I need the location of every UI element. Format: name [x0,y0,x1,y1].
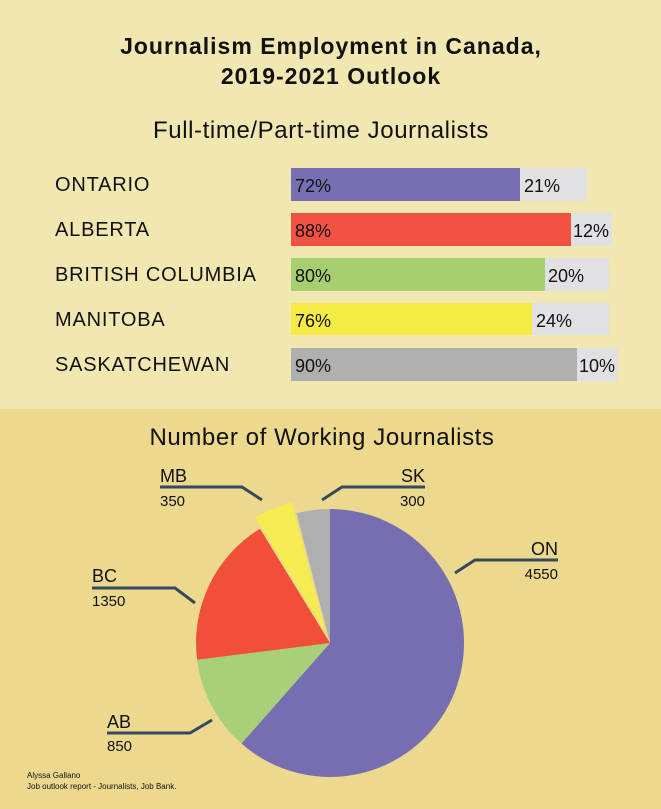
heading: number of journalists: Number of Working Journalists [149,424,495,451]
text: BC [92,566,117,586]
row: Manitoba: 24% [536,311,572,331]
row: Saskatchewan: 10% [579,356,615,376]
row: Manitoba: 76% [295,311,331,331]
text: 850 [107,738,132,755]
text: MB [160,466,187,486]
text: SK [401,466,425,486]
text: AB [107,712,131,732]
row: Ontario: 21% [524,176,560,196]
row: Saskatchewan: SASKATCHEWAN [55,354,230,376]
row: Saskatchewan [55,348,618,381]
row: Manitoba: MANITOBA [55,309,166,331]
text: 1350 [92,593,125,610]
text: 300 [400,493,425,510]
row: Alberta [55,213,612,246]
footer credit [27,771,176,791]
footer credit: Job outlook report - Journalists, Job Bank. [27,782,176,791]
footer credit: Alyssa Gallano [27,771,81,780]
row: Alberta: 12% [573,221,609,241]
pie labels [92,487,558,733]
heading: full-time/part-time: Full-time/Part-time Journalists [153,117,489,144]
row: British Columbia [55,258,609,291]
text: 350 [160,493,185,510]
title: Journalism Employment in Canada, [120,33,542,59]
row: British Columbia: BRITISH COLUMBIA [55,264,257,286]
row: Manitoba [55,303,609,335]
text: 4550 [525,566,558,583]
row: British Columbia: 80% [295,266,331,286]
title: 2019-2021 Outlook [221,63,441,89]
row: Ontario [55,168,587,201]
bar chart [55,168,618,381]
title [120,33,542,89]
row: Alberta: ALBERTA [55,219,150,241]
text: ON [531,539,558,559]
row: Ontario: 72% [295,176,331,196]
row: Saskatchewan: 90% [295,356,331,376]
pie chart [196,502,464,777]
row: Ontario: ONTARIO [55,174,150,196]
row: British Columbia: 20% [548,266,584,286]
row: Alberta: 88% [295,221,331,241]
